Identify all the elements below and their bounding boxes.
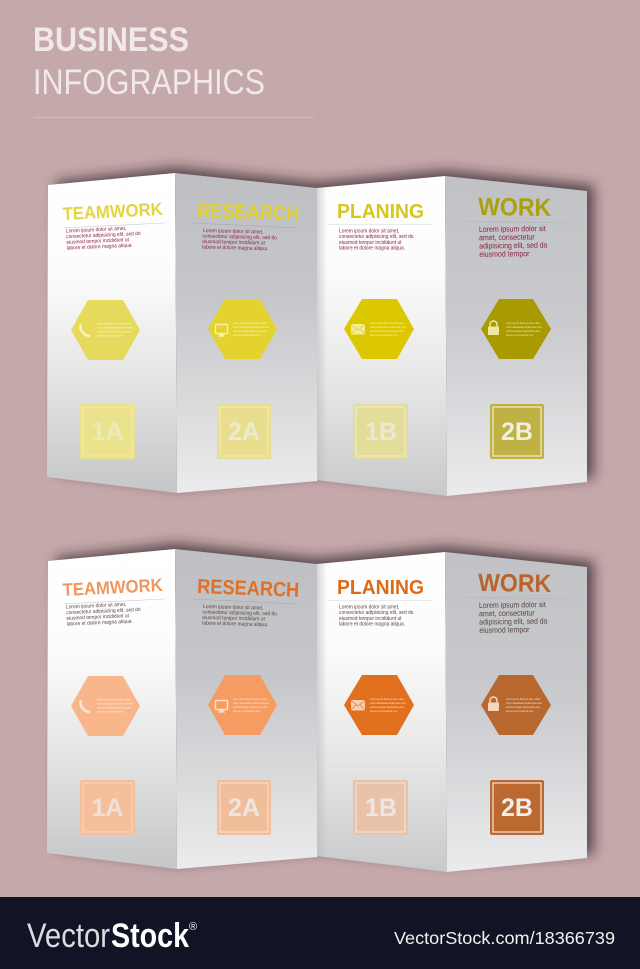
hexagon with phone icon (71, 676, 140, 736)
badge: 1A (80, 780, 135, 835)
panel: teamwork (47, 173, 177, 493)
hexagon with monitor icon (208, 675, 277, 735)
micro text: Lorem ipsum dolor sit amet, dolor (97, 698, 131, 702)
text: research body: consectetur adipisicing elit, sed do (202, 609, 277, 617)
text: teamwork body: consectetur adipisicing elit, sed do (66, 231, 141, 240)
heading: teamwork: TEAMWORK (62, 199, 163, 224)
icon: lock (488, 321, 499, 335)
micro text: euismod integer lacinia justo ante (506, 706, 541, 709)
text: planing body: Lorem ipsum dolor sit amet, (339, 228, 399, 235)
micro text: nunc malesuada condimentum sed (233, 326, 269, 329)
badge: 2B (490, 780, 544, 835)
text: research body: labore et dolore magna aliqua. (202, 620, 268, 628)
icon: monitor (216, 324, 228, 337)
icon: lock (488, 697, 499, 711)
micro text: arcu ac urna euismod et ut (97, 334, 125, 338)
badge: 1B (353, 780, 408, 835)
badge: 1B (353, 404, 408, 459)
text: teamwork body: labore et dolore magna aliqua. (67, 243, 133, 252)
text: work body: adipisicing elit, sed do (479, 616, 548, 627)
text: planing body: Lorem ipsum dolor sit amet, (339, 604, 399, 611)
text: work body: adipisicing elit, sed do (479, 240, 548, 251)
micro text: nunc malesuada condimentum sed (370, 326, 406, 329)
badge: 2A: 2A (228, 794, 260, 822)
heading: infographics: INFOGRAPHICS (33, 63, 265, 102)
micro text: Lorem ipsum dolor sit amet, dolor (233, 322, 267, 325)
hexagon with monitor icon (208, 299, 277, 359)
text: teamwork body: eiusmod tempor incididunt ut (66, 613, 130, 622)
micro text: Lorem ipsum dolor sit amet, dolor (370, 698, 404, 701)
micro text: euismod integer lacinia justo ante (506, 330, 541, 333)
heading: research: RESEARCH (197, 575, 300, 602)
micro text: Lorem ipsum dolor sit amet, dolor (370, 322, 404, 325)
micro text: Lorem ipsum dolor sit amet, dolor (506, 322, 540, 325)
heading: planing: PLANING (337, 577, 424, 599)
text: research body: eiusmod tempor incididunt ut (202, 239, 265, 247)
text: planing body: eiusmod tempor incididunt ut (339, 240, 402, 246)
text: teamwork body: consectetur adipisicing elit, sed do (66, 607, 141, 616)
micro text: euismod integer lacinia justo ante (370, 330, 405, 333)
text: planing body: labore et dolore magna aliqua. (339, 621, 405, 628)
badge: 2B (490, 404, 544, 459)
panel: research (175, 173, 317, 493)
micro text: arcu ac urna euismod et ut (233, 334, 261, 337)
text: planing body: labore et dolore magna aliqua. (339, 245, 405, 252)
logo: VectorStock: Vector (27, 917, 110, 955)
micro text: nunc malesuada condimentum sed (97, 702, 133, 706)
panel: yellow brochure (47, 167, 594, 496)
icon: envelope (351, 324, 365, 334)
micro text: arcu ac urna euismod et ut (506, 334, 534, 337)
icon: monitor (216, 700, 228, 713)
icon: phone (80, 702, 89, 712)
panel: planing (317, 176, 447, 496)
title (33, 21, 265, 102)
micro text: Lorem ipsum dolor sit amet, dolor (233, 698, 267, 701)
micro text: nunc malesuada condimentum sed (370, 702, 406, 705)
badge: 1A: 1A (92, 794, 123, 822)
panel: teamwork (47, 549, 177, 869)
hexagon with envelope icon (344, 675, 414, 735)
heading: work: WORK (478, 193, 551, 222)
heading: planing: PLANING (337, 201, 424, 223)
hexagon with envelope icon (344, 299, 414, 359)
text: teamwork body: Lorem ipsum dolor sit amet, (66, 602, 126, 611)
badge: 1A (80, 404, 135, 459)
badge: 1B: 1B (365, 418, 397, 446)
text: research body: Lorem ipsum dolor sit amet, (203, 604, 263, 612)
logo: VectorStock (27, 917, 197, 955)
panel: planing (317, 552, 447, 872)
heading: research: RESEARCH (197, 199, 300, 226)
micro text: arcu ac urna euismod et ut (370, 334, 398, 337)
micro text: euismod integer lacinia justo ante (233, 706, 268, 709)
brochure shadow (56, 167, 594, 488)
badge: 2B: 2B (501, 794, 533, 822)
text: work body: Lorem ipsum dolor sit (479, 224, 547, 234)
badge: 2A: 2A (228, 418, 260, 446)
footer bar (0, 897, 640, 969)
heading: teamwork: TEAMWORK (62, 575, 163, 600)
text: work body: Lorem ipsum dolor sit (479, 600, 547, 610)
text: planing body: consectetur adipisicing elit, sed do (339, 610, 414, 616)
badge: 2A (217, 404, 271, 459)
micro text: nunc malesuada condimentum sed (506, 702, 542, 705)
text: work body: eiusmod tempor (479, 249, 530, 259)
hexagon with phone icon (71, 300, 140, 360)
badge: 1A: 1A (92, 418, 123, 446)
micro text: euismod integer lacinia justo ante (370, 706, 405, 709)
micro text: Lorem ipsum dolor sit amet, dolor (506, 698, 540, 701)
text: work body: eiusmod tempor (479, 625, 530, 635)
logo: VectorStock: Stock (111, 917, 189, 955)
text: research body: labore et dolore magna aliqua. (202, 244, 268, 252)
text: planing body: consectetur adipisicing elit, sed do (339, 234, 414, 240)
text: teamwork body: Lorem ipsum dolor sit amet, (66, 226, 126, 235)
icon: phone (80, 326, 89, 336)
hexagon with lock icon (481, 299, 551, 359)
panel: work (445, 552, 587, 872)
micro text: arcu ac urna euismod et ut (233, 710, 261, 713)
badge: 2A (217, 780, 271, 835)
micro text: arcu ac urna euismod et ut (506, 710, 534, 713)
micro text: arcu ac urna euismod et ut (370, 710, 398, 713)
heading: work: WORK (478, 569, 551, 598)
text: research body: eiusmod tempor incididunt ut (202, 615, 265, 623)
text: teamwork body: eiusmod tempor incididunt ut (66, 237, 130, 246)
text: research body: Lorem ipsum dolor sit amet, (203, 228, 263, 236)
micro text: nunc malesuada condimentum sed (97, 326, 133, 330)
hexagon with lock icon (481, 675, 551, 735)
text: work body: amet, consectetur (479, 608, 535, 618)
text: research body: consectetur adipisicing elit, sed do (202, 233, 277, 241)
panel: work (445, 176, 587, 496)
brochure shadow (56, 543, 594, 864)
micro text: euismod integer lacinia justo ante (97, 330, 132, 334)
icon: envelope (351, 700, 365, 710)
micro text: nunc malesuada condimentum sed (233, 702, 269, 705)
micro text: nunc malesuada condimentum sed (506, 326, 542, 329)
badge: 2B: 2B (501, 418, 533, 446)
micro text: euismod integer lacinia justo ante (97, 706, 132, 710)
image id: VectorStock.com/18366739 (394, 928, 615, 948)
text: work body: amet, consectetur (479, 232, 535, 242)
micro text: Lorem ipsum dolor sit amet, dolor (97, 322, 131, 326)
text: planing body: eiusmod tempor incididunt ut (339, 616, 402, 622)
text: teamwork body: labore et dolore magna aliqua. (67, 619, 133, 628)
heading: business: BUSINESS (33, 21, 189, 59)
micro text: euismod integer lacinia justo ante (233, 330, 268, 333)
logo: VectorStock: ® (189, 921, 197, 933)
micro text: arcu ac urna euismod et ut (97, 710, 125, 714)
badge: 1B: 1B (365, 794, 397, 822)
panel: research (175, 549, 317, 869)
panel: orange brochure (47, 543, 594, 872)
